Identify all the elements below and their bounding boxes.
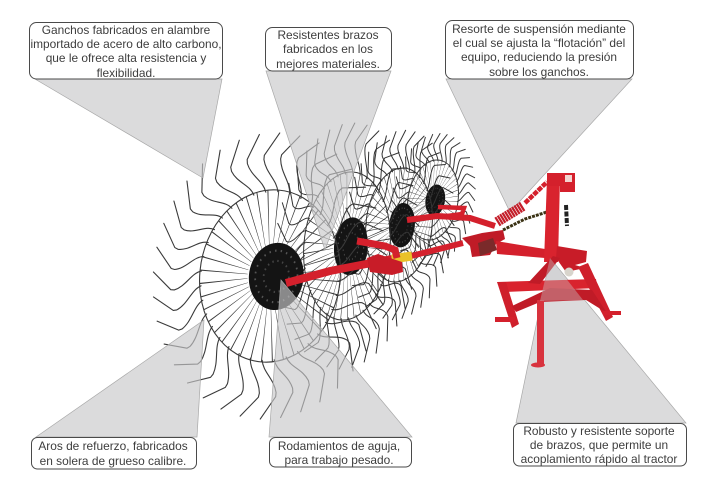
callout: soporte: acoplamiento rápido al tractor [521, 452, 677, 466]
clamp on main arm [367, 254, 403, 275]
top head [547, 173, 575, 192]
callout: rodamientos [270, 438, 412, 467]
central joint [462, 230, 505, 257]
callout: aros: Aros de refuerzo, fabricados [38, 439, 188, 453]
wheel 2 short arm [357, 241, 397, 258]
callout: rodamientos: Rodamientos de aguja, [278, 439, 400, 453]
callout: aros: en solera de grueso calibre. [40, 454, 186, 468]
red machine frame [286, 173, 621, 368]
suspension spring [497, 206, 523, 222]
callout: ganchos: Ganchos fabricados en alambre [42, 23, 211, 37]
callout wedge: rodamientos [269, 280, 412, 437]
callout: brazos: Resistentes brazos [277, 28, 379, 42]
red chain [525, 182, 547, 203]
right leg [578, 263, 613, 321]
stand [537, 300, 544, 365]
callout: brazos [266, 28, 392, 71]
wheel 3 long arm [407, 216, 495, 226]
callout: aros [32, 438, 196, 469]
callout: ganchos: importado de acero de alto carbono, [30, 37, 222, 51]
callout: brazos: mejores materiales. [276, 57, 380, 71]
callout wedge: ganchos [35, 79, 222, 178]
wheel 3 [335, 126, 463, 324]
rear arm to post [496, 241, 545, 258]
callout: resorte [446, 20, 634, 79]
left leg [497, 282, 519, 328]
callout wedge: resorte [446, 79, 632, 212]
callout: soporte [514, 424, 686, 466]
callout wedge: aros [36, 320, 204, 437]
callout: soporte: de brazos, que permite un [530, 438, 668, 452]
pivot bolt [564, 268, 574, 276]
main arm to front wheel [286, 259, 392, 283]
A-frame bar [497, 279, 597, 292]
callout: rodamientos: para trabajo pesado. [284, 453, 394, 467]
hitch pins [495, 311, 621, 322]
yellow sleeve [392, 256, 412, 259]
rear section of main arm [411, 243, 463, 256]
callout: resorte: el cual se ajusta la “flotación” del [453, 36, 625, 50]
translucent pointer triangle over frame [540, 258, 583, 301]
callout: resorte: Resorte de suspensión mediante [452, 22, 626, 36]
wheel 4 short arm [438, 207, 464, 217]
wheel 1 (front rake wheel) [139, 123, 401, 429]
callout: ganchos: flexibilidad. [97, 66, 155, 80]
callout wedge: brazos [266, 71, 391, 250]
callout: resorte: sobre los ganchos. [489, 65, 589, 79]
callout: brazos: fabricados en los [283, 42, 373, 56]
callout: ganchos [30, 22, 222, 80]
dark chain [503, 212, 547, 230]
callout: ganchos: que le ofrece alta resistencia y [46, 51, 206, 65]
callout: soporte: Robusto y resistente soporte [523, 424, 675, 438]
vertical post [544, 178, 560, 262]
braces [512, 288, 607, 313]
callout: resorte: equipo, reduciendo la presión [461, 50, 617, 64]
callout wedge: soporte [516, 258, 686, 423]
wheel 4 (rearmost rake wheel) [383, 130, 483, 270]
black hanging chain [566, 205, 567, 226]
mast plate [556, 246, 587, 272]
wheel 2 [265, 117, 429, 375]
stand foot [531, 362, 545, 368]
